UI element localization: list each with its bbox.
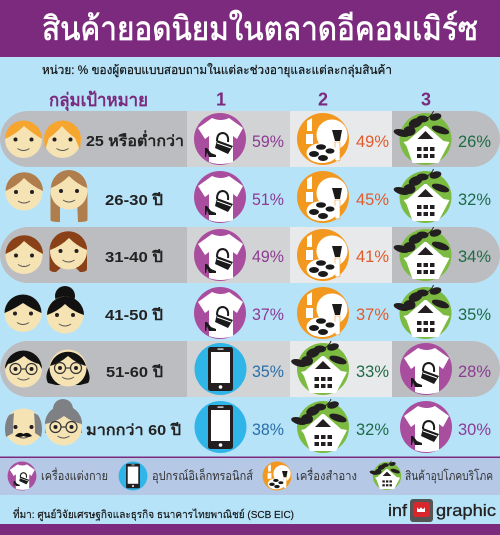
column headers: 2 (318, 90, 328, 110)
legend: electronics (119, 462, 253, 490)
row 4: 41-50 (4, 285, 491, 339)
column headers: กลุ่มเป้าหมาย (49, 90, 148, 112)
bottom band (0, 524, 500, 535)
row 2: 26-30 (6, 169, 491, 223)
icons and values: 30% (458, 421, 491, 439)
icons and values (194, 169, 491, 223)
faces (5, 350, 90, 388)
column headers: 3 (421, 90, 431, 110)
age label: 26-30 ปี (105, 192, 163, 209)
logo: infographic: graphic (436, 501, 497, 520)
icons and values: 33% (356, 363, 389, 381)
age label: 31-40 ปี (105, 249, 163, 266)
row 1: 25 or under (5, 111, 491, 165)
icons and values: 49% (356, 133, 389, 151)
age label: 51-60 ปี (106, 364, 163, 381)
legend: consumer goods (369, 461, 493, 490)
icons and values (194, 227, 491, 281)
icons and values: 34% (458, 248, 491, 266)
icons and values: 41% (356, 248, 389, 266)
faces (6, 231, 87, 274)
source: ที่มา: ศูนย์วิจัยเศรษฐกิจและธุรกิจ ธนาคารไทยพาณิชย์ (SCB EIC) (13, 507, 294, 521)
row 3: 31-40 (6, 227, 491, 281)
legend: cosmetics (263, 462, 357, 490)
icons and values (194, 111, 491, 165)
title band (0, 0, 500, 57)
faces (5, 399, 82, 446)
legend band (0, 456, 500, 495)
age label: 25 หรือต่ำกว่า (86, 130, 184, 150)
logo: infographic (388, 499, 497, 522)
legend: apparel: เครื่องแต่งกาย (41, 467, 108, 483)
icons and values: 28% (458, 363, 491, 381)
column headers (49, 90, 431, 112)
icons and values: 49% (252, 248, 284, 266)
faces (5, 120, 81, 158)
faces (4, 286, 84, 334)
icons and values: 37% (252, 306, 284, 324)
age label: มากกว่า 60 ปี (86, 422, 181, 439)
legend: cosmetics: เครื่องสำอาง (296, 467, 357, 483)
icons and values: 32% (458, 191, 491, 209)
age label: 41-50 ปี (105, 307, 163, 324)
icons and values (194, 399, 491, 453)
icons and values: 45% (356, 191, 389, 209)
logo: infographic: inf (388, 501, 407, 520)
unit note: หน่วย: % ของผู้ตอบแบบสอบถามในแต่ละช่วงอายุและแต่ละกลุ่มสินค้า (42, 63, 392, 78)
faces (6, 170, 88, 222)
icons and values (194, 341, 491, 395)
icons and values: 35% (252, 363, 284, 381)
icons and values: 37% (356, 306, 389, 324)
column headers: 1 (216, 90, 226, 110)
legend: apparel (8, 462, 108, 490)
icons and values: 32% (356, 421, 389, 439)
row 5: 51-60 (5, 341, 491, 395)
row 6: over 60 (5, 399, 491, 453)
icons and values: 35% (458, 306, 491, 324)
icons and values: 51% (252, 191, 284, 209)
icons and values (194, 285, 491, 339)
icons and values: 26% (458, 133, 491, 151)
row bands (0, 111, 500, 397)
icons and values: 38% (252, 421, 284, 439)
legend: electronics: อุปกรณ์อิเล็กทรอนิกส์ (152, 468, 253, 484)
icons and values: 59% (252, 133, 284, 151)
